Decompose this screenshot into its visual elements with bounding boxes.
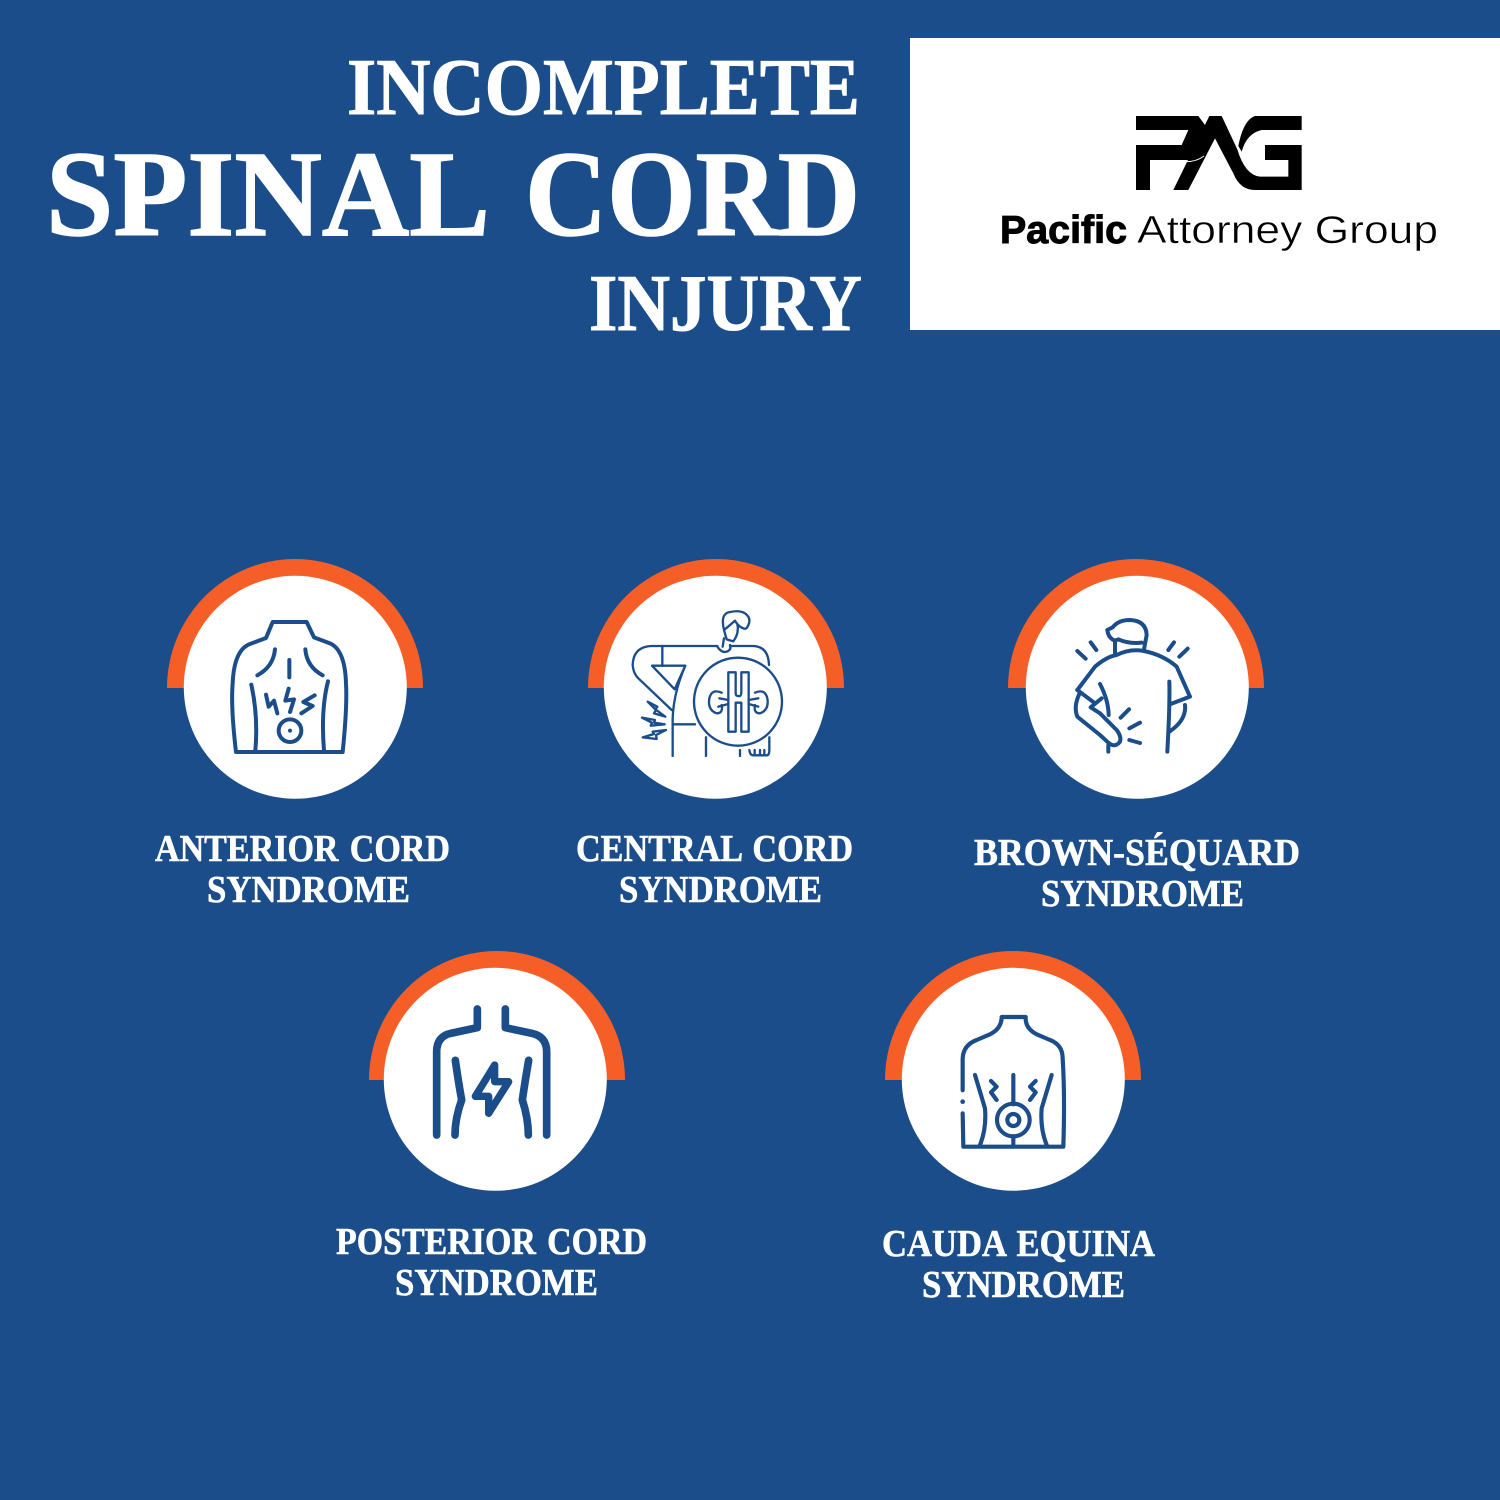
- label: SYNDROME: [922, 1264, 1125, 1306]
- label: [155, 828, 450, 911]
- icon: man with kidneys and pain: [633, 611, 782, 756]
- icon: man holding his back: [1076, 620, 1190, 752]
- logo panel: [910, 38, 1500, 330]
- title: [46, 42, 862, 348]
- label: [336, 1221, 647, 1304]
- title: INCOMPLETE: [347, 42, 860, 132]
- panel: anterior cord syndrome: [155, 559, 450, 911]
- label: [882, 1223, 1156, 1306]
- icon: torso with lower back pain: [232, 622, 346, 752]
- label: CAUDA EQUINA: [882, 1223, 1156, 1265]
- logo wordmark: Pacific: [1000, 209, 1127, 252]
- label: SYNDROME: [1041, 873, 1244, 915]
- badge: orange arc and white circle: [369, 951, 625, 1191]
- label: ANTERIOR CORD: [155, 828, 450, 870]
- title: CORD: [525, 127, 860, 262]
- label: [576, 828, 853, 911]
- panel: posterior cord syndrome: [336, 951, 647, 1304]
- panel: cauda equina syndrome: [882, 951, 1156, 1306]
- label: POSTERIOR CORD: [336, 1221, 647, 1263]
- label: CENTRAL CORD: [576, 828, 853, 870]
- panel: brown-sequard syndrome: [974, 559, 1300, 915]
- icon: torso with lumbar target: [960, 1017, 1064, 1147]
- panel: central cord syndrome: [576, 559, 853, 911]
- title: INJURY: [589, 258, 862, 348]
- title: SPINAL: [46, 127, 490, 262]
- badge: orange arc and white circle: [588, 559, 844, 799]
- logo wordmark: Attorney Group: [1137, 209, 1438, 252]
- badge: orange arc and white circle: [167, 559, 423, 799]
- logo mark: PAG: [1136, 116, 1302, 190]
- badge: orange arc and white circle: [885, 951, 1141, 1191]
- label: SYNDROME: [207, 869, 410, 911]
- label: SYNDROME: [619, 869, 822, 911]
- icon: torso with lightning bolt: [437, 1009, 547, 1135]
- badge: orange arc and white circle: [1008, 559, 1264, 799]
- logo wordmark: [1000, 209, 1438, 252]
- label: SYNDROME: [395, 1262, 598, 1304]
- label: BROWN-SÉQUARD: [974, 832, 1300, 874]
- label: [974, 832, 1300, 915]
